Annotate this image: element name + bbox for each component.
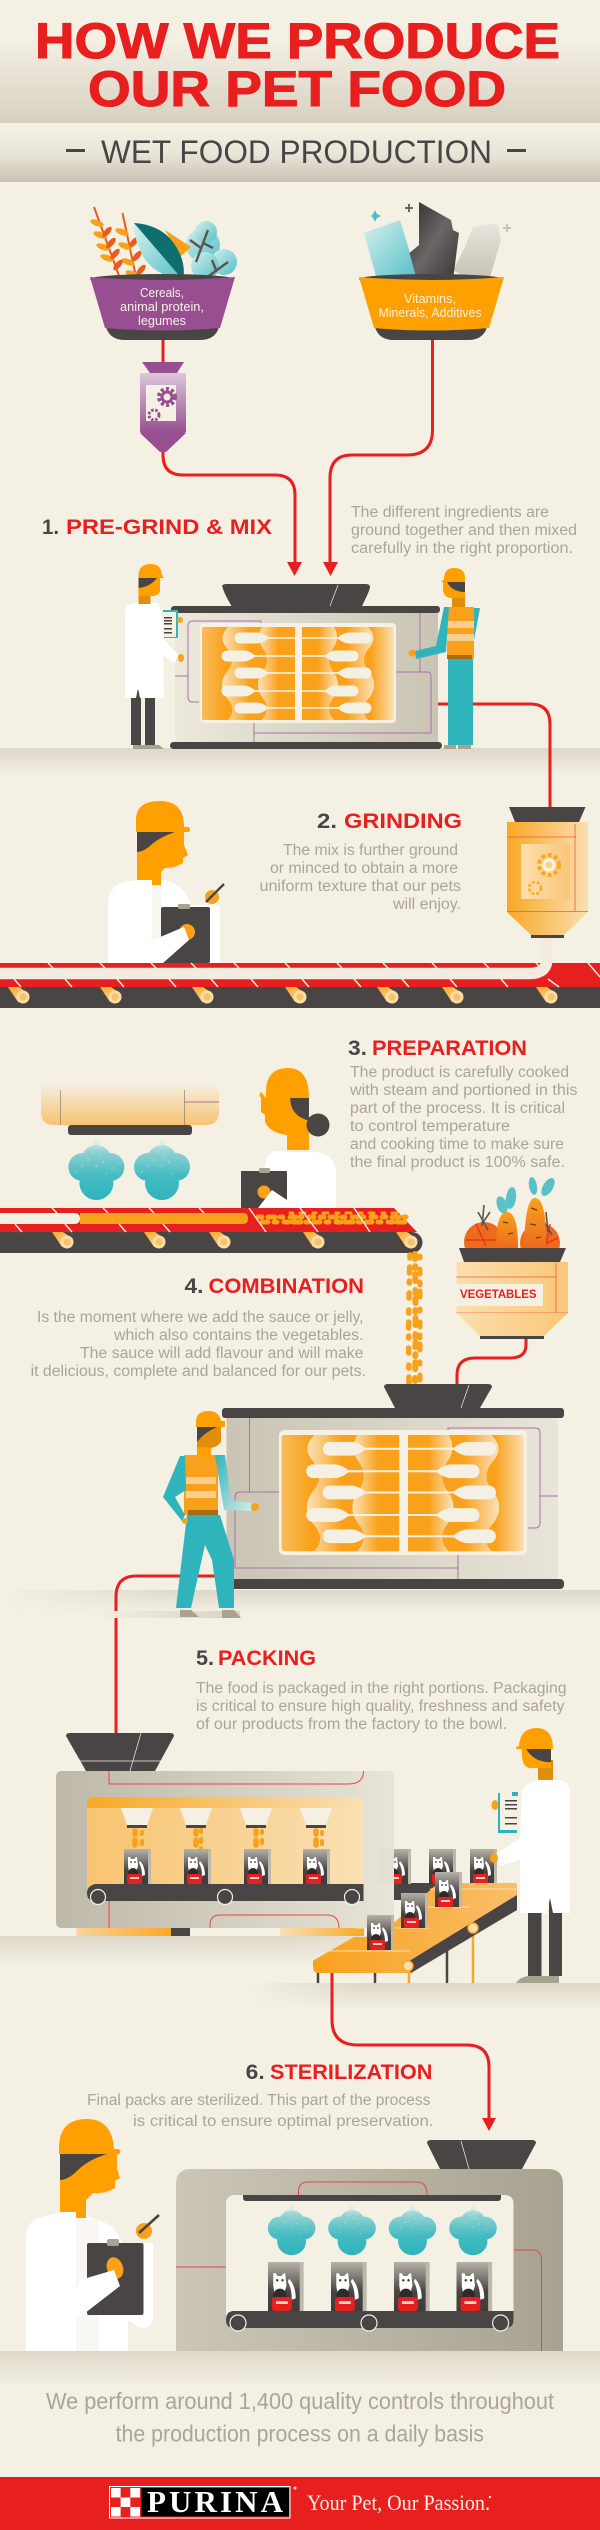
Purina logo: PURINA — [147, 2484, 284, 2519]
machine: packing — [56, 1733, 394, 1936]
step 5 text — [196, 1680, 566, 1733]
shadow under worker — [88, 1611, 240, 1618]
step 5 text: is critical to ensure high quality, freshness and safety — [196, 1698, 565, 1715]
machine: vegetables hopper — [456, 1248, 568, 1339]
step 3 text — [349, 1064, 578, 1171]
floor shadows 3 — [0, 1936, 600, 2002]
step 3 text: and cooking time to make sure — [350, 1136, 564, 1153]
step 2 text: will enjoy. — [392, 896, 461, 913]
title: HOW WE PRODUCE — [35, 13, 560, 69]
steamer unit — [41, 1083, 219, 1135]
step 6 heading: STERILIZATION — [270, 2061, 432, 2084]
step 2 heading: 2. — [317, 810, 337, 833]
step 6 text: Final packs are sterilized. This part of the process — [87, 2092, 431, 2109]
icon: wheat, leaf and plant — [89, 207, 237, 280]
worker: preparation — [241, 1068, 336, 1208]
machine: vegetables hopper: VEGETABLES — [460, 1287, 536, 1301]
step 6 heading: 6. — [246, 2061, 265, 2084]
bowl: cereals — [90, 274, 235, 340]
step 2 text: The mix is further ground — [283, 842, 458, 859]
worker: sterilization inspector — [26, 2119, 159, 2351]
bowl: vitamins: Vitamins, — [404, 292, 456, 306]
closing statement: We perform around 1,400 quality controls throughout — [46, 2388, 555, 2414]
red pipe combination to packing — [116, 1576, 235, 1735]
step 1 heading: PRE-GRIND & MIX — [66, 516, 272, 539]
floor shadow 2 — [55, 1590, 600, 1606]
step 1 text: ground together and then mixed — [351, 522, 577, 539]
step 1 text: carefully in the right proportion. — [351, 540, 573, 557]
step 4 text: Is the moment where we add the sauce or jelly, — [37, 1309, 364, 1326]
floor shadow 1 — [0, 748, 600, 776]
conveyor: grinding — [0, 963, 600, 1008]
closing statement — [46, 2388, 555, 2446]
red pipe vegetables to combination — [457, 1339, 526, 1385]
grinder outlet product stream — [0, 938, 547, 974]
machine: sterilizer — [176, 2140, 563, 2351]
step 4 heading: 4. — [184, 1275, 204, 1298]
floor shadow 4 — [0, 2351, 600, 2387]
step 3 text: with steam and portioned in this — [349, 1082, 578, 1099]
step 3 text: The product is carefully cooked — [350, 1064, 569, 1081]
step 2 text: uniform texture that our pets — [260, 878, 461, 895]
bowl: cereals: animal protein, — [120, 300, 204, 314]
step 5 heading: PACKING — [218, 1647, 316, 1670]
step 4 text: which also contains the vegetables. — [113, 1327, 364, 1344]
header band — [0, 0, 600, 182]
footer bar — [0, 2477, 600, 2530]
closing statement: the production process on a daily basis — [116, 2420, 484, 2446]
arrowhead into sterilizer — [482, 2118, 496, 2131]
step 1 text: The different ingredients are — [351, 504, 549, 521]
red pipe mixer to grinder — [438, 704, 550, 808]
step 4 text: it delicious, complete and balanced for our pets. — [31, 1363, 366, 1380]
step 5 text: The food is packaged in the right portions. Packaging — [196, 1680, 566, 1697]
step 2 text: or minced to obtain a more — [270, 860, 458, 877]
step 3 text: the final product is 100% safe. — [350, 1154, 565, 1171]
tagline: Your Pet, Our Passion. — [307, 2490, 490, 2515]
step 2 text — [260, 842, 461, 913]
conveyor: preparation — [0, 1208, 422, 1253]
red pipe packing to sterilization — [332, 1973, 489, 2120]
step 6 text — [87, 2092, 434, 2130]
falling kibble — [409, 1254, 420, 1384]
bowl: cereals: Cereals, — [140, 286, 184, 300]
icon: vegetables — [464, 1176, 560, 1263]
step 6 text: is critical to ensure optimal preservation. — [133, 2113, 434, 2130]
arrowheads into mixer — [287, 562, 338, 576]
step 2 heading: GRINDING — [344, 810, 462, 833]
bowl: cereals: legumes — [138, 314, 186, 328]
worker: packing — [490, 1728, 570, 1983]
title — [35, 13, 560, 117]
worker: combination — [163, 1411, 259, 1618]
step 5 heading: 5. — [196, 1647, 214, 1670]
step 4 text — [31, 1309, 366, 1380]
machine: mixer — [170, 584, 442, 749]
step 4 heading: COMBINATION — [208, 1275, 364, 1298]
step 3 heading: 3. — [348, 1037, 367, 1060]
worker: vest right — [408, 568, 480, 749]
steam clouds — [68, 1140, 190, 1200]
step 1 heading: 1. — [42, 516, 59, 539]
title: OUR PET FOOD — [88, 61, 506, 117]
step 4 text: The sauce will add flavour and will make — [80, 1345, 364, 1362]
packing line — [313, 1849, 517, 1983]
step 1 text — [351, 504, 577, 557]
red pipes from ingredient bowls to mixer — [163, 340, 432, 565]
worker: lab coat left — [125, 564, 184, 749]
icon: mineral crystals — [364, 202, 511, 280]
subtitle: WET FOOD PRODUCTION — [101, 134, 492, 170]
machine: grinder — [507, 807, 588, 938]
step 3 text: part of the process. It is critical — [350, 1100, 565, 1117]
pre-grinder hopper — [140, 362, 186, 452]
step 3 text: to control temperature — [350, 1118, 510, 1135]
worker: grinding inspector — [108, 801, 224, 963]
bowl: vitamins — [359, 274, 504, 340]
step 5 text: of our products from the factory to the bowl. — [196, 1716, 507, 1733]
machine: combination — [222, 1384, 564, 1589]
bowl: vitamins: Minerals, Additives — [378, 306, 482, 320]
step 3 heading: PREPARATION — [372, 1037, 527, 1060]
